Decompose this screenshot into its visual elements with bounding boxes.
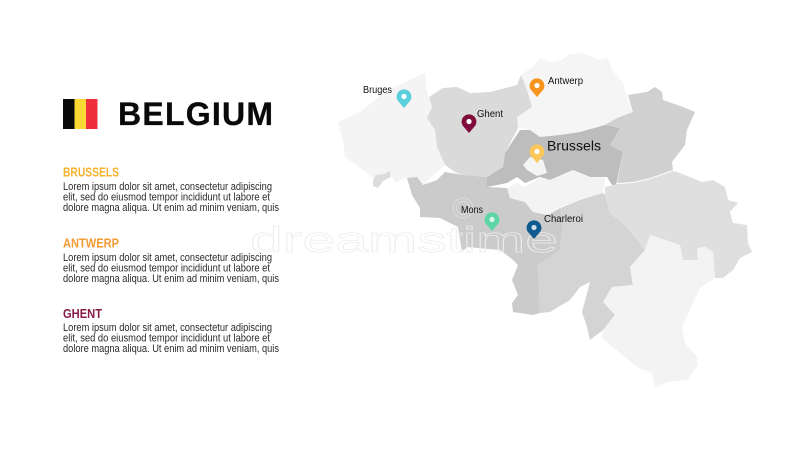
text block: Ghent — [63, 307, 279, 355]
region: Luxembourg — [602, 235, 715, 388]
heading: Brussels: BRUSSELS — [63, 166, 119, 180]
watermark: dreamstime — [250, 219, 558, 260]
region: Antwerp province — [517, 53, 633, 137]
region: Brussels — [523, 157, 547, 176]
heading: Ghent: GHENT — [63, 307, 102, 321]
body: Antwerp: elit, sed do eiusmod tempor incididunt ut labore et — [63, 262, 270, 274]
label: Charleroi: Charleroi — [544, 214, 583, 225]
label: Mons: Mons — [461, 205, 483, 216]
label: Ghent: Ghent — [477, 109, 503, 120]
body: Antwerp: dolore magna aliqua. Ut enim ad minim veniam, quis — [63, 273, 279, 285]
text block: Brussels — [63, 166, 279, 214]
region: West Flanders — [338, 73, 445, 185]
pin: Mons — [485, 212, 499, 231]
title: BELGIUM — [118, 96, 273, 132]
body: Ghent: Lorem ipsum dolor sit amet, consectetur adipiscing — [63, 322, 272, 334]
body: Antwerp: Lorem ipsum dolor sit amet, consectetur adipiscing — [63, 252, 272, 264]
pin: Bruges — [397, 89, 411, 108]
region: Namur — [538, 193, 645, 340]
watermark — [250, 198, 558, 260]
map of Belgium — [338, 53, 752, 388]
pin: Antwerp — [530, 78, 544, 97]
pin: Brussels — [530, 144, 544, 163]
label: Antwerp: Antwerp — [548, 76, 583, 87]
flag of Belgium — [63, 99, 98, 129]
body: Brussels: elit, sed do eiusmod tempor incididunt ut labore et — [63, 192, 270, 204]
body: Antwerp — [63, 252, 279, 285]
pin: Ghent — [462, 114, 476, 133]
region: Walloon Brabant — [507, 170, 605, 215]
heading: Antwerp: ANTWERP — [63, 236, 119, 250]
text block: Antwerp — [63, 236, 279, 285]
region: Limburg — [605, 87, 695, 183]
body: Ghent: dolore magna aliqua. Ut enim ad minim veniam, quis — [63, 343, 279, 355]
body: Brussels: dolore magna aliqua. Ut enim ad minim veniam, quis — [63, 202, 279, 214]
region: coastal inlet — [373, 171, 391, 188]
label: Brussels: Brussels — [547, 138, 601, 154]
body: Brussels: Lorem ipsum dolor sit amet, consectetur adipiscing — [63, 181, 272, 193]
body: Brussels — [63, 181, 279, 214]
body: Ghent — [63, 322, 279, 355]
label: Bruges: Bruges — [363, 85, 392, 96]
body: Ghent: elit, sed do eiusmod tempor incididunt ut labore et — [63, 332, 270, 344]
region: East Flanders — [427, 75, 532, 177]
region: Flemish Brabant — [487, 125, 623, 187]
pin: Charleroi — [527, 220, 541, 239]
region: Liege — [605, 171, 752, 278]
region: Hainaut — [407, 172, 563, 315]
